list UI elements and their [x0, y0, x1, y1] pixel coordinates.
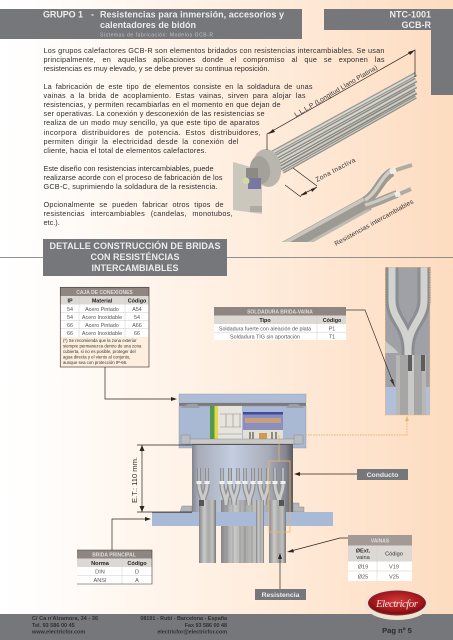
- table: caja de conexiones: CAJA DE CONEXIONES: [76, 290, 133, 296]
- table: caja de conexiones: (*) Se recomienda que la zona exterior: [63, 338, 137, 343]
- design paragraph: Este diseño con resistencias intercambiables, puede: [44, 164, 214, 173]
- table: brida principal: D: [135, 570, 139, 576]
- table: caja de conexiones: A66: [132, 323, 142, 329]
- header bar: reference code: NTC-1001: [389, 10, 431, 20]
- orange detail frame: [269, 461, 290, 532]
- table: caja de conexiones: Acero Pintado: [85, 307, 119, 313]
- label: conducto: [294, 469, 408, 480]
- Y-forked elements: [196, 468, 286, 505]
- header bar: group title: Sistemas de fabricación: Modelos GCB-R: [100, 32, 213, 38]
- table: brida principal: Norma: [91, 561, 110, 567]
- footer address: [31, 616, 98, 636]
- detail inset: [385, 267, 430, 415]
- connection box: [179, 394, 306, 448]
- label: conducto: Conducto: [367, 472, 398, 479]
- table: brida principal: ANSI: [93, 578, 107, 584]
- table: vainas: Ø25: [358, 574, 368, 580]
- table: caja de conexiones: 66: [67, 331, 73, 337]
- fabrication paragraph: permiten dirigir la electricidad desde la conexión del: [44, 137, 239, 146]
- table: soldadura brida-vaina: Soldadura fuerte con aleación de plata: [219, 326, 311, 332]
- table: vainas: [287, 535, 412, 581]
- table: soldadura brida-vaina: SOLDADURA BRIDA-VAINA: [247, 310, 313, 316]
- header bar: group title: GRUPO 1: [43, 10, 83, 20]
- section title: DETALLE CONSTRUCCIÓN DE BRIDAS: [50, 240, 220, 251]
- table: caja de conexiones: aunque sea con protección IP-66.: [63, 360, 127, 365]
- table: caja de conexiones: [60, 287, 149, 367]
- table: caja de conexiones: IP: [67, 298, 73, 304]
- table: caja de conexiones: Acero Pintado: [85, 323, 119, 329]
- footer address: Tel. 93 586 00 45: [32, 623, 75, 629]
- page number: Pag nº 5: [382, 626, 413, 635]
- intro paragraph: [44, 46, 385, 73]
- table: caja de conexiones: 54: [67, 315, 73, 321]
- footer contact: 08191 - Rubí - Barcelona - España: [140, 616, 228, 622]
- table: vainas: Ø19: [358, 564, 368, 570]
- leader: soldadura to detail: [346, 310, 395, 387]
- fabrication paragraph: ser operativas. La conexión y desconexión de las resistencias se: [44, 109, 264, 118]
- table: soldadura brida-vaina: P1: [329, 326, 335, 332]
- fabrication paragraph: resistencias, y permiten recambiarlas en el momento en que dejan de: [44, 100, 280, 109]
- header bar: group title: Resistencias para inmersión, accesorios y: [100, 10, 284, 20]
- table: vainas: VAINAS: [371, 538, 390, 544]
- conduit: [192, 444, 293, 512]
- table: soldadura brida-vaina: [214, 307, 346, 340]
- flange mounting: [233, 162, 262, 214]
- dimension: E.T. 110 mm: [130, 445, 192, 512]
- options paragraph: Opcionalmente se pueden fabricar otros tipos de: [44, 200, 224, 209]
- leader: caja to box: [105, 367, 177, 401]
- table: vainas: vaina: [356, 555, 371, 561]
- footer contact: Fax 93 586 00 48: [185, 623, 227, 629]
- label: resistencia: Resistencia: [262, 592, 300, 599]
- options paragraph: etc.).: [44, 218, 60, 227]
- table: vainas: ØExt.: [356, 548, 371, 554]
- table: caja de conexiones: 54: [67, 307, 73, 313]
- table: caja de conexiones: 66: [67, 323, 73, 329]
- logo: Electricfor: [364, 589, 430, 620]
- table: soldadura brida-vaina: Tipo: [259, 318, 271, 324]
- table: caja de conexiones: Acero Inoxidable: [82, 315, 122, 321]
- options paragraph: resistencias intercambiables (candelas, monotubos,: [44, 209, 232, 218]
- intro paragraph: Los grupos calefactores GCB-R son elementos bridados con resistencias intercambiables. Se usan: [44, 46, 384, 55]
- table: caja de conexiones: A54: [132, 307, 142, 313]
- table: brida principal: DIN: [95, 570, 105, 576]
- table: soldadura brida-vaina: Código: [323, 318, 342, 324]
- table: vainas: V25: [389, 574, 399, 580]
- tubes behind the flange: [221, 500, 264, 563]
- header bar: group title: calentadores de bidón: [100, 20, 196, 30]
- table: vainas: Código: [385, 552, 403, 558]
- design paragraph: [44, 164, 223, 191]
- footer contact: [140, 616, 228, 636]
- table: vainas: V19: [389, 564, 399, 570]
- design paragraph: GCB-C, suprimiendo la soldadura de la resistencia.: [44, 182, 218, 191]
- footer contact: electricfor@electricfor.com: [157, 630, 227, 636]
- label: resistencia: [255, 553, 306, 600]
- heating elements bundle: [272, 74, 416, 172]
- table: caja de conexiones: Material: [92, 298, 113, 304]
- cross-section drawing: [152, 394, 333, 563]
- label: resistencias intercambiables: Resistencias intercambiables: [334, 198, 415, 248]
- main flange: [152, 512, 333, 526]
- table: brida principal: A: [135, 578, 139, 584]
- header bar: reference code: GCB-R: [402, 20, 431, 30]
- fabrication paragraph: La fabricación de este tipo de elementos consiste en la soldadura de unas: [44, 82, 313, 91]
- heater illustration: [233, 74, 416, 214]
- header bar: group title: [0, 9, 302, 39]
- fabrication paragraph: incorpora distribuidores de potencia. Estos distribuidores,: [44, 128, 260, 137]
- table: soldadura brida-vaina: T1: [329, 334, 335, 340]
- intro paragraph: principalmente, en aquellas aplicaciones donde el compromiso al que se exponen las: [44, 55, 385, 64]
- intro paragraph: resistencias es muy elevado, y se debe prever su continua reposición.: [44, 64, 270, 73]
- divider: [0, 256, 453, 259]
- dimension: zona inactiva: Zona Inactiva: [315, 157, 357, 184]
- table: brida principal: Código: [127, 561, 147, 567]
- fabrication paragraph: cliente, hacia el total de elementos calefactores.: [44, 146, 206, 155]
- footer bar: [0, 614, 453, 640]
- fabrication paragraph: [44, 82, 313, 155]
- interchangeable elements: [282, 163, 412, 242]
- fabrication paragraph: vainas a la brida de acoplamiento. Estas vainas, sirven para alojar las: [44, 91, 306, 100]
- footer address: www.electricfor.com: [31, 630, 85, 636]
- dimension arrow: L.L.L.P: [267, 50, 415, 150]
- dimension: E.T. 110 mm: E.T.: 110 mm.: [130, 457, 139, 503]
- table: caja de conexiones: 54: [134, 315, 140, 321]
- header bar: group title: -: [91, 10, 94, 20]
- tubes in front of the flange: [199, 500, 216, 563]
- footer address: C/ Ca n'Alzamora, 34 - 36: [32, 616, 98, 622]
- section title: INTERCAMBIABLES: [92, 263, 178, 273]
- dimension arrow: L.L.L.P: L.L.L.P (Longitud Llano Platina): [293, 64, 379, 119]
- table: brida principal: BRIDA PRINCIPAL: [92, 552, 136, 558]
- table: caja de conexiones: siempre permanezca dentro de una zona: [63, 344, 142, 348]
- orange dotted link to detail: [292, 416, 409, 435]
- options paragraph: [44, 200, 232, 227]
- table: caja de conexiones: agua directa y el viento al conjunto,: [63, 354, 130, 360]
- leader: brida to flange: [112, 517, 151, 550]
- header bar: reference code: [324, 9, 453, 95]
- fabrication paragraph: realiza de un modo muy sencillo, ya que este tipo de aparatos: [44, 118, 260, 127]
- section title: [43, 239, 227, 276]
- table: caja de conexiones: 66: [134, 331, 140, 337]
- side fixings: [180, 503, 304, 512]
- table: caja de conexiones: cubierta, si no es posible, proteger del: [63, 349, 136, 354]
- table: caja de conexiones: Acero Inoxidable: [82, 331, 122, 337]
- table: brida principal: [77, 550, 152, 584]
- table: soldadura brida-vaina: Soldadura TIG sin aportación: [230, 334, 300, 340]
- dimension: zona inactiva: [285, 157, 357, 197]
- logo: Electricfor: Electricfor: [375, 598, 419, 610]
- table: caja de conexiones: Código: [128, 298, 147, 304]
- section title: CON RESISTÉNCIAS: [90, 252, 180, 262]
- design paragraph: realizarse acorde con el proceso de fabricación de los: [44, 173, 223, 182]
